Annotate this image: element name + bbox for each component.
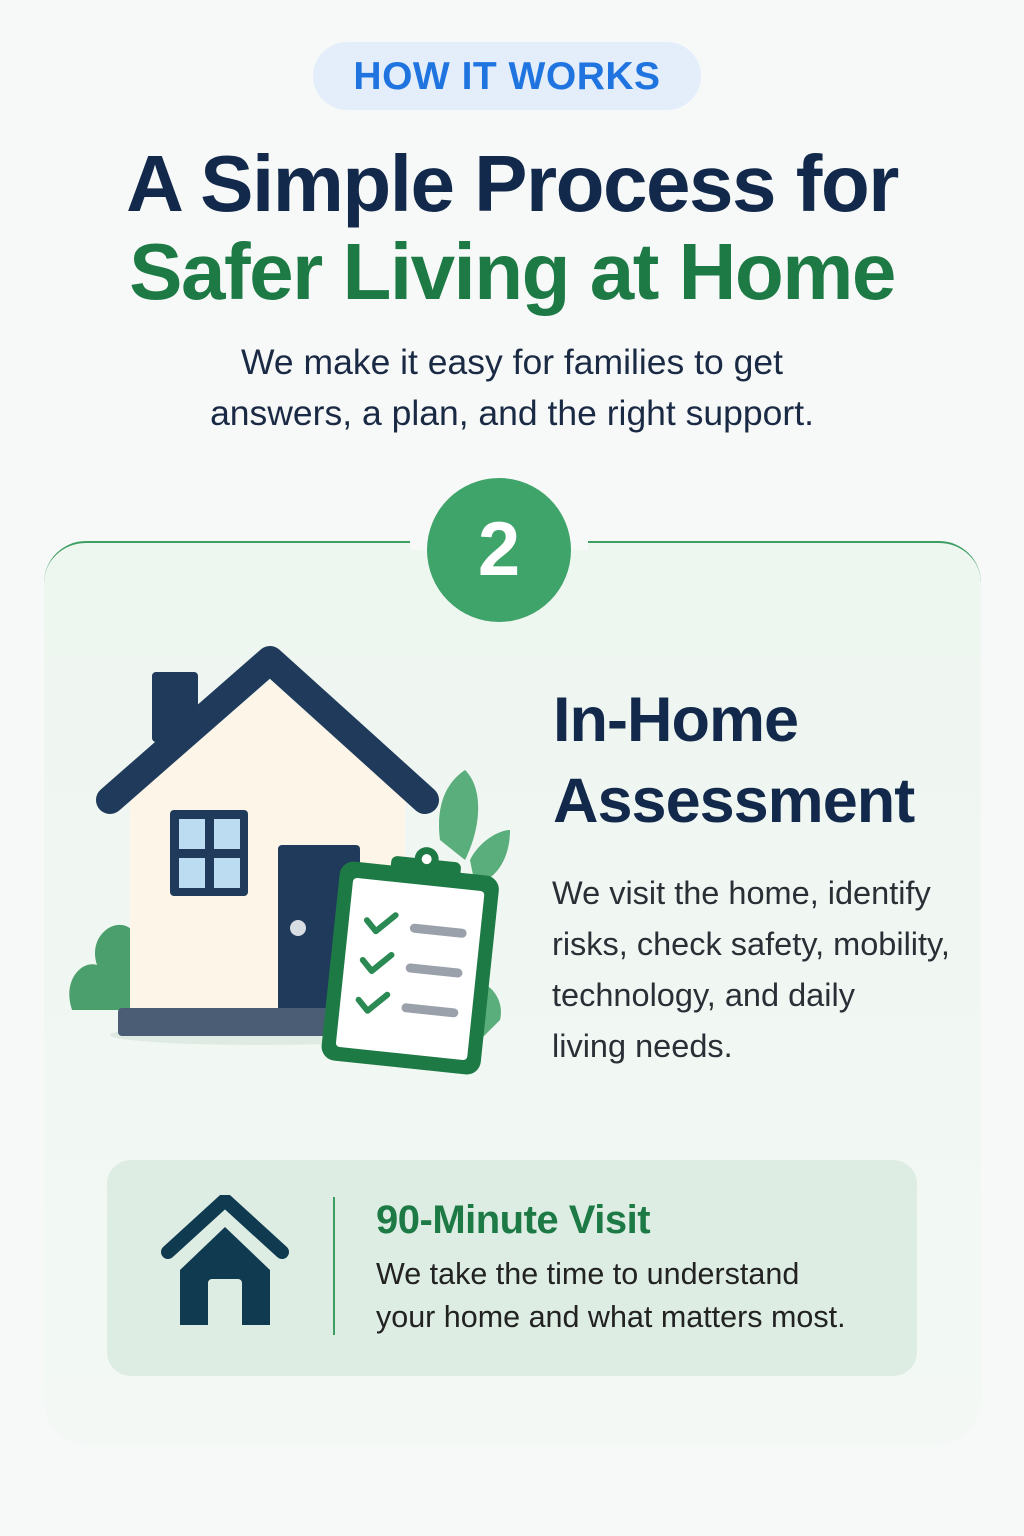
heading: In-Home Assessment: Assessment [553,766,914,836]
callout title: 90-Minute Visit [376,1198,650,1242]
icon: house [161,1195,289,1325]
panel: step card [44,541,981,1444]
body text: technology, and daily [552,977,855,1013]
callout text [376,1257,846,1334]
callout text: We take the time to understand [376,1257,799,1291]
step number badge [427,478,571,622]
subtitle [210,342,814,433]
callout box: 90-minute visit [107,1160,917,1376]
badge: how it works [313,42,701,110]
subtitle: We make it easy for families to get [241,342,783,382]
callout text: your home and what matters most. [376,1300,846,1334]
title: Safer Living at Home [129,227,895,316]
body text: living needs. [552,1028,733,1064]
badge: how it works: HOW IT WORKS [353,55,661,98]
title: A Simple Process for [126,139,898,228]
title [126,139,898,316]
heading: In-Home Assessment: In-Home [553,685,798,755]
subtitle: answers, a plan, and the right support. [210,393,814,433]
body text: We visit the home, identify [552,875,931,911]
body text [552,875,950,1064]
heading: In-Home Assessment [553,685,914,836]
step number badge: 2 [478,507,520,592]
illustration: house with clipboard [69,646,510,1074]
body text: risks, check safety, mobility, [552,926,950,962]
